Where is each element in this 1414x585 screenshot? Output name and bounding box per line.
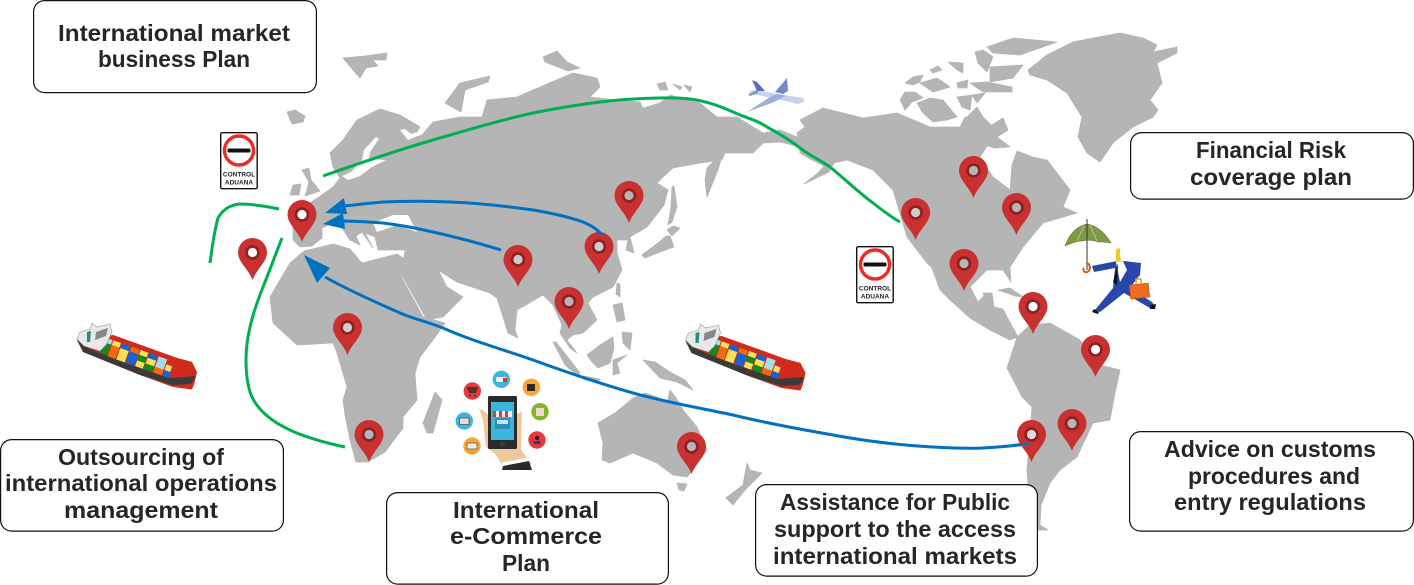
pin: Spain [288, 200, 316, 242]
icon: wallet [523, 379, 540, 396]
pin: Canada [959, 156, 988, 198]
text box: International e-Commerce Plan: Plan [502, 550, 550, 576]
text box: Assistance for Public support: Assistance for Public [780, 489, 1010, 515]
text box: Advice on customs procedures [1130, 432, 1413, 531]
cargo ship: Pacific [686, 324, 806, 390]
text box: Assistance for Public support: support to the access [774, 516, 1016, 542]
text box: International e-Commerce Plan: International [453, 497, 599, 523]
pin: Mexico [950, 249, 978, 291]
text box: Advice on customs procedures: entry regulations [1174, 489, 1366, 515]
pin: Central Africa [333, 313, 362, 355]
green route: Europe to North America [323, 98, 900, 222]
customs sign: Europe: CONTROL [223, 172, 255, 178]
Baltic Sea [342, 137, 386, 180]
text box: Assistance for Public support [756, 485, 1037, 576]
map pins [238, 156, 1110, 474]
landmass: Eurasia [293, 73, 801, 353]
landmass: Arctic Canada [900, 38, 1057, 127]
customs sign: Europe [221, 133, 257, 189]
customs sign: Europe: ADUANA [225, 180, 253, 186]
text box: International market business Plan [34, 1, 316, 93]
pin: Australia [677, 432, 706, 474]
icon: delivery truck [493, 371, 510, 388]
Black Sea [373, 215, 417, 232]
customs sign: North America: ADUANA [861, 294, 889, 300]
icon: service person [528, 431, 546, 449]
pin: East China [584, 232, 614, 274]
landmass: Sakhalin and Japan [642, 152, 723, 258]
icon: smartphone [488, 396, 517, 449]
text box: Advice on customs procedures: procedures and [1188, 463, 1360, 489]
pin: Eastern US [1002, 193, 1031, 235]
icon: shopping cart [464, 382, 481, 400]
landmass: Cuba [998, 288, 1023, 297]
pin: Western US [901, 198, 930, 240]
pin: Colombia [1018, 292, 1048, 334]
text box: Financial Risk coverage plan [1131, 133, 1413, 199]
blue route: China to Spain [325, 198, 602, 235]
pin: Chile [1017, 420, 1046, 462]
text box: International e-Commerce Plan [387, 493, 668, 584]
blue route tip over China pin [597, 231, 602, 235]
landmass: South America [1007, 323, 1120, 530]
landmass: Arctic islands of Eurasia [343, 51, 692, 112]
text box: Assistance for Public support: international markets [773, 543, 1017, 569]
icon: sale tag [463, 437, 481, 455]
text box: Outsourcing of international operations management [1, 440, 283, 531]
pin: North China [614, 181, 644, 223]
icon: bill [456, 412, 473, 430]
green route: Spain to South Africa [246, 238, 345, 447]
text box: Advice on customs procedures: Advice on customs [1164, 436, 1376, 462]
White Sea [400, 129, 417, 140]
pin: South-East Asia [554, 287, 584, 329]
text box: International e-Commerce Plan: e-Commerce [450, 523, 602, 549]
landmass: South-East Asia islands [553, 283, 693, 390]
blue route tip over Chile pin [1013, 443, 1030, 446]
text box: Outsourcing of international operations management: management [64, 497, 218, 523]
cargo ship: Atlantic [77, 323, 197, 390]
text box: International market business Plan: business Plan [98, 46, 250, 72]
icon: hand holding phone [479, 409, 532, 467]
e-commerce phone illustration [456, 371, 549, 470]
landmass: Madagascar [423, 392, 442, 433]
pin: South Africa [354, 420, 384, 462]
landmass: North America [797, 108, 1077, 340]
landmass: Africa [270, 244, 445, 462]
pin: North Brazil [1081, 335, 1110, 377]
pin: India [504, 245, 532, 287]
blue route: South America to Africa [304, 255, 1030, 448]
text box: Outsourcing of international operations management: Outsourcing of [58, 444, 224, 470]
pin: South Brazil [1058, 409, 1086, 451]
icon: store [531, 403, 549, 420]
customs sign: North America [857, 247, 893, 303]
businessman with umbrella [1065, 219, 1156, 314]
green route: Spain to Atlantic [210, 204, 279, 263]
world map [270, 33, 1177, 530]
text box: Outsourcing of international operations management: international operations [5, 470, 277, 496]
landmass: British Isles and Iceland [287, 110, 320, 196]
text box: Financial Risk coverage plan: Financial Risk [1196, 137, 1346, 163]
text box: International market business Plan: International market [58, 20, 290, 46]
airplane [747, 78, 804, 112]
landmass: Australia and New Zealand [598, 390, 762, 505]
blue route: India to Spain [323, 213, 501, 250]
customs sign: North America: CONTROL [859, 286, 891, 292]
text box: Financial Risk coverage plan: coverage plan [1190, 164, 1352, 190]
pin: Atlantic [238, 238, 267, 280]
landmass: Greenland [1028, 33, 1177, 162]
